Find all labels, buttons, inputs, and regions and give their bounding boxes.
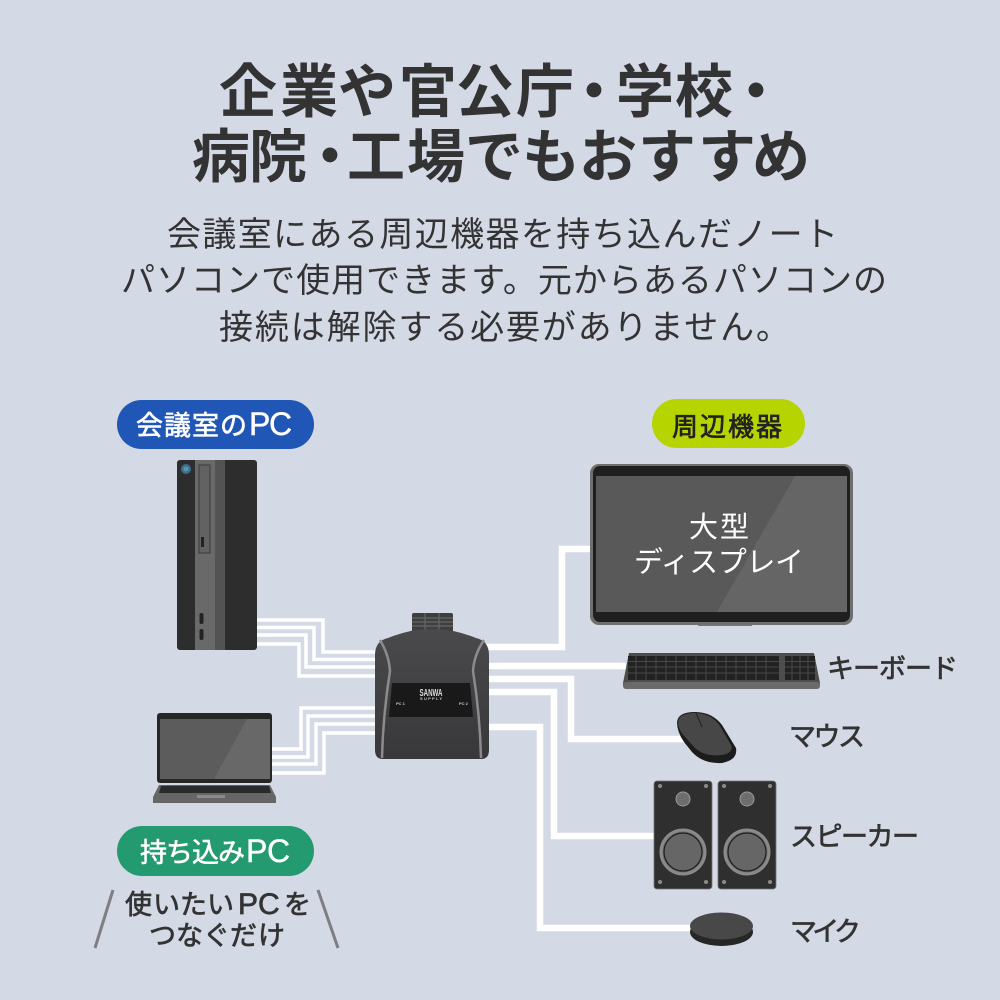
icon: large display: 大型 [689, 511, 749, 544]
badge: peripherals [652, 399, 805, 448]
icon: microphone [690, 912, 753, 946]
icon: laptop [153, 713, 276, 803]
label: microphone: マイク [790, 917, 861, 947]
icon: large display [590, 464, 853, 626]
badge: meeting room PC: PC [249, 406, 292, 442]
icon: speakers [654, 781, 776, 889]
note: just connect the PC you want to use: 使いたい [125, 890, 234, 920]
note: just connect the PC you want to use [95, 888, 338, 951]
badge: meeting room PC: 会議室の [136, 411, 247, 441]
title: 病院・工場でもおすすめ [192, 125, 810, 190]
note: just connect the PC you want to use: PC [238, 888, 280, 921]
note: just connect the PC you want to use: を [284, 890, 311, 920]
description text: 会議室にある周辺機器を持ち込んだノート [167, 216, 838, 254]
label: speakers: スピーカー [790, 822, 919, 852]
title: 企業や官公庁・学校・ [219, 60, 785, 125]
icon: KVM switch: SANWA [420, 688, 442, 699]
badge: peripherals: 周辺機器 [672, 412, 782, 442]
cables: switch to peripherals [486, 549, 692, 928]
note: just connect the PC you want to use: つなぐだけ [149, 921, 285, 951]
cables: laptop to switch [272, 708, 376, 773]
title [192, 60, 810, 190]
icon: left speaker [654, 781, 712, 889]
label: mouse: マウス [789, 722, 865, 752]
description text [121, 216, 887, 347]
icon: mouse [677, 712, 736, 763]
icon: KVM switch: PC 2 [459, 701, 469, 706]
cables: meeting room PC to switch [257, 620, 376, 676]
icon: KVM switch: SUPPLY [420, 696, 442, 701]
label: keyboard: キーボード [827, 654, 958, 684]
description text: 接続は解除する必要がありません。 [219, 309, 790, 347]
badge: carry-in PC: 持ち込み [140, 838, 245, 868]
badge: carry-in PC [117, 826, 314, 876]
icon: large display: ディスプレイ [634, 546, 804, 579]
icon: KVM switch [375, 613, 489, 759]
icon: right speaker [718, 781, 776, 889]
badge: carry-in PC: PC [246, 833, 290, 869]
icon: tower PC [177, 460, 257, 650]
icon: keyboard [623, 653, 820, 689]
badge: meeting room PC [117, 400, 314, 449]
icon: KVM switch: PC 1 [396, 701, 406, 706]
description text: パソコンで使用できます。元からあるパソコンの [121, 262, 887, 300]
